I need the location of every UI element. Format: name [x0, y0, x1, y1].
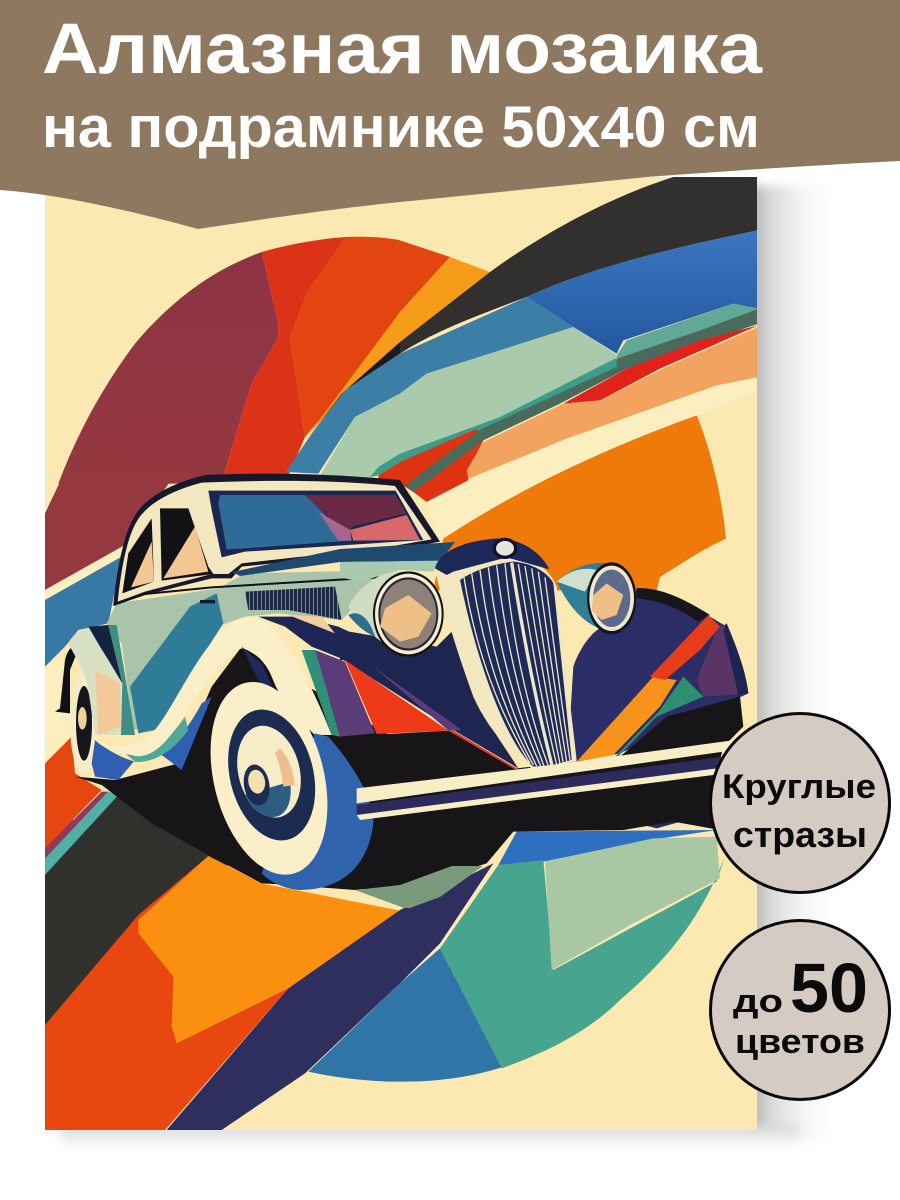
teal fender edge — [125, 717, 188, 762]
side windows — [122, 508, 213, 593]
badge: round rhinestones: стразы — [733, 814, 867, 855]
rear wheel and wing — [55, 625, 135, 773]
hood panel — [340, 561, 438, 582]
far fender — [570, 588, 748, 828]
car front (right part) — [340, 538, 735, 820]
lower left bands — [45, 820, 400, 1130]
title: Алмазная мозаика — [42, 10, 763, 89]
canvas shadow — [60, 186, 835, 1147]
badge: up to 50 colours: цветов — [735, 1023, 865, 1061]
subtitle: на подрамнике 50х40 см — [42, 95, 760, 160]
front wheel — [210, 682, 374, 890]
panel: painting — [45, 177, 758, 1130]
fender flank — [340, 630, 518, 769]
front fender — [242, 615, 375, 737]
lower right circle sectors — [400, 830, 725, 1082]
cabin — [113, 474, 440, 605]
hood stripe — [232, 542, 455, 576]
upper left circle sectors — [58, 237, 400, 484]
cream fender arc — [95, 618, 332, 756]
sill — [92, 697, 212, 780]
badge: round rhinestones — [710, 714, 890, 892]
radiator grille — [435, 538, 577, 768]
body side — [107, 570, 392, 733]
car body (left part) — [55, 474, 440, 890]
badge: round rhinestones: Круглые — [722, 768, 876, 806]
left background stripes — [45, 484, 169, 888]
windshield — [208, 491, 423, 557]
upper right sweeping bands — [400, 177, 758, 590]
badge: up to 50 colours: до — [733, 983, 783, 1019]
badge: up to 50 colours: 50 — [790, 949, 868, 1027]
right headlight — [557, 562, 636, 634]
left headlight — [348, 571, 444, 657]
car shadow — [75, 647, 743, 908]
front bumper — [357, 740, 735, 820]
header banner — [0, 0, 900, 229]
badge: up to 50 colours — [710, 920, 890, 1100]
